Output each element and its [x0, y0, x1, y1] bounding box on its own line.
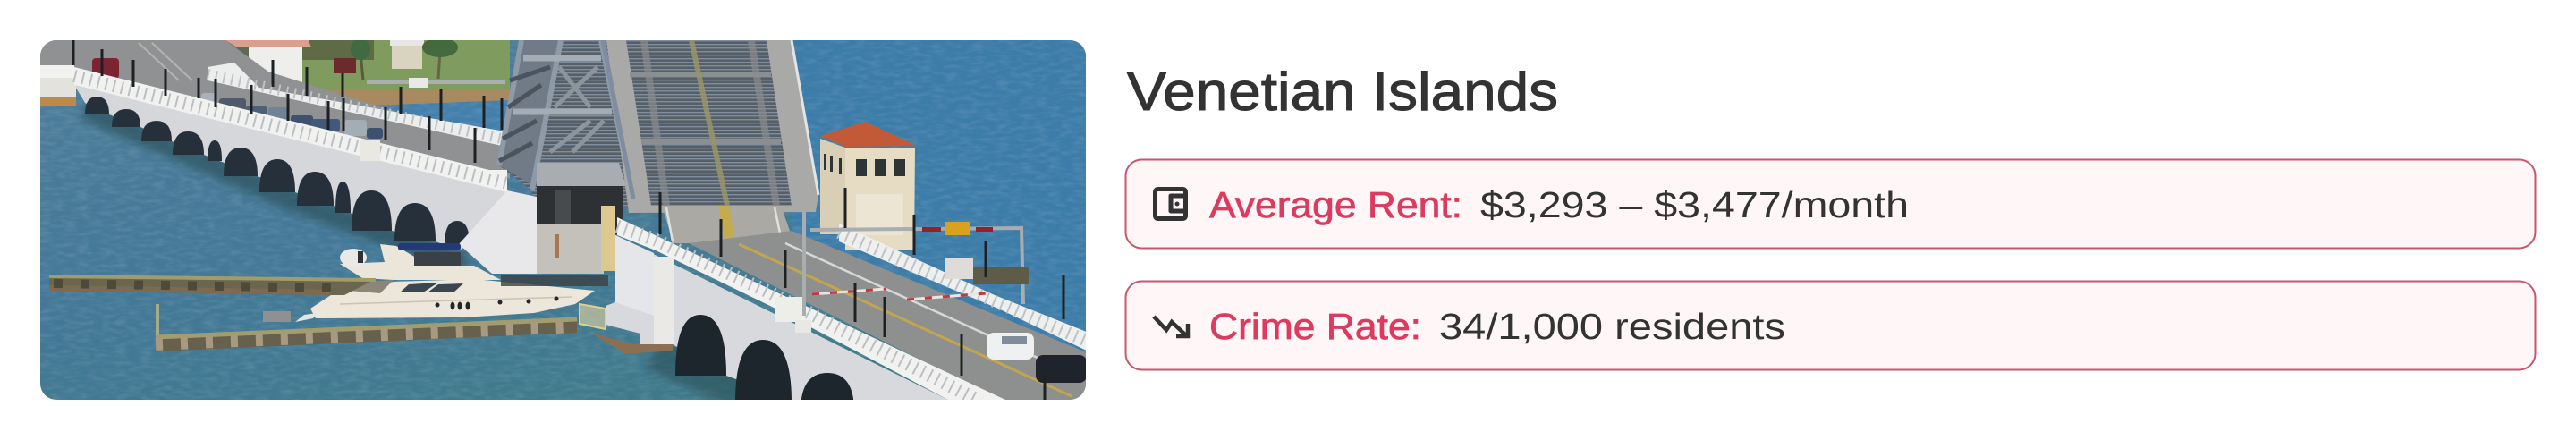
lower dock	[156, 206, 615, 351]
water	[40, 40, 1089, 416]
cars on right span	[987, 333, 1087, 383]
right span of bridge	[590, 217, 1005, 411]
road on right span	[689, 231, 1089, 402]
far railing on right span	[839, 224, 1089, 351]
yacht	[310, 243, 608, 318]
shore and gardens at top left	[213, 38, 510, 106]
far railing on left span	[208, 63, 510, 148]
lamp posts	[73, 40, 1063, 400]
value: crime rate: 34/1,000 residents	[1439, 306, 1785, 347]
raised bridge leaf	[603, 40, 818, 243]
arches	[85, 97, 470, 244]
cars in queue and red car	[92, 58, 383, 139]
stat row: average rent	[1125, 159, 2535, 249]
bridge tender house	[820, 122, 917, 250]
traffic signal gantry and barriers	[804, 212, 1029, 316]
infographic card	[40, 40, 2537, 400]
title: Venetian Islands	[1127, 62, 1558, 122]
icon: wallet	[1156, 190, 1186, 218]
arches	[675, 315, 853, 400]
upper dock	[49, 275, 376, 295]
left bridge pier	[459, 170, 537, 274]
label: crime rate: Crime Rate:	[1209, 306, 1421, 347]
stat row: crime rate	[1125, 281, 2535, 370]
value: rent range: $3,293 – $3,477/month	[1480, 184, 1909, 225]
panel: neighbourhood photo	[40, 38, 1089, 416]
road on left span	[40, 40, 510, 179]
left span of bridge	[40, 65, 507, 250]
icon: trending down	[1154, 317, 1188, 336]
label: average rent: Average Rent:	[1209, 184, 1462, 225]
bascule tower lattice	[499, 40, 633, 274]
